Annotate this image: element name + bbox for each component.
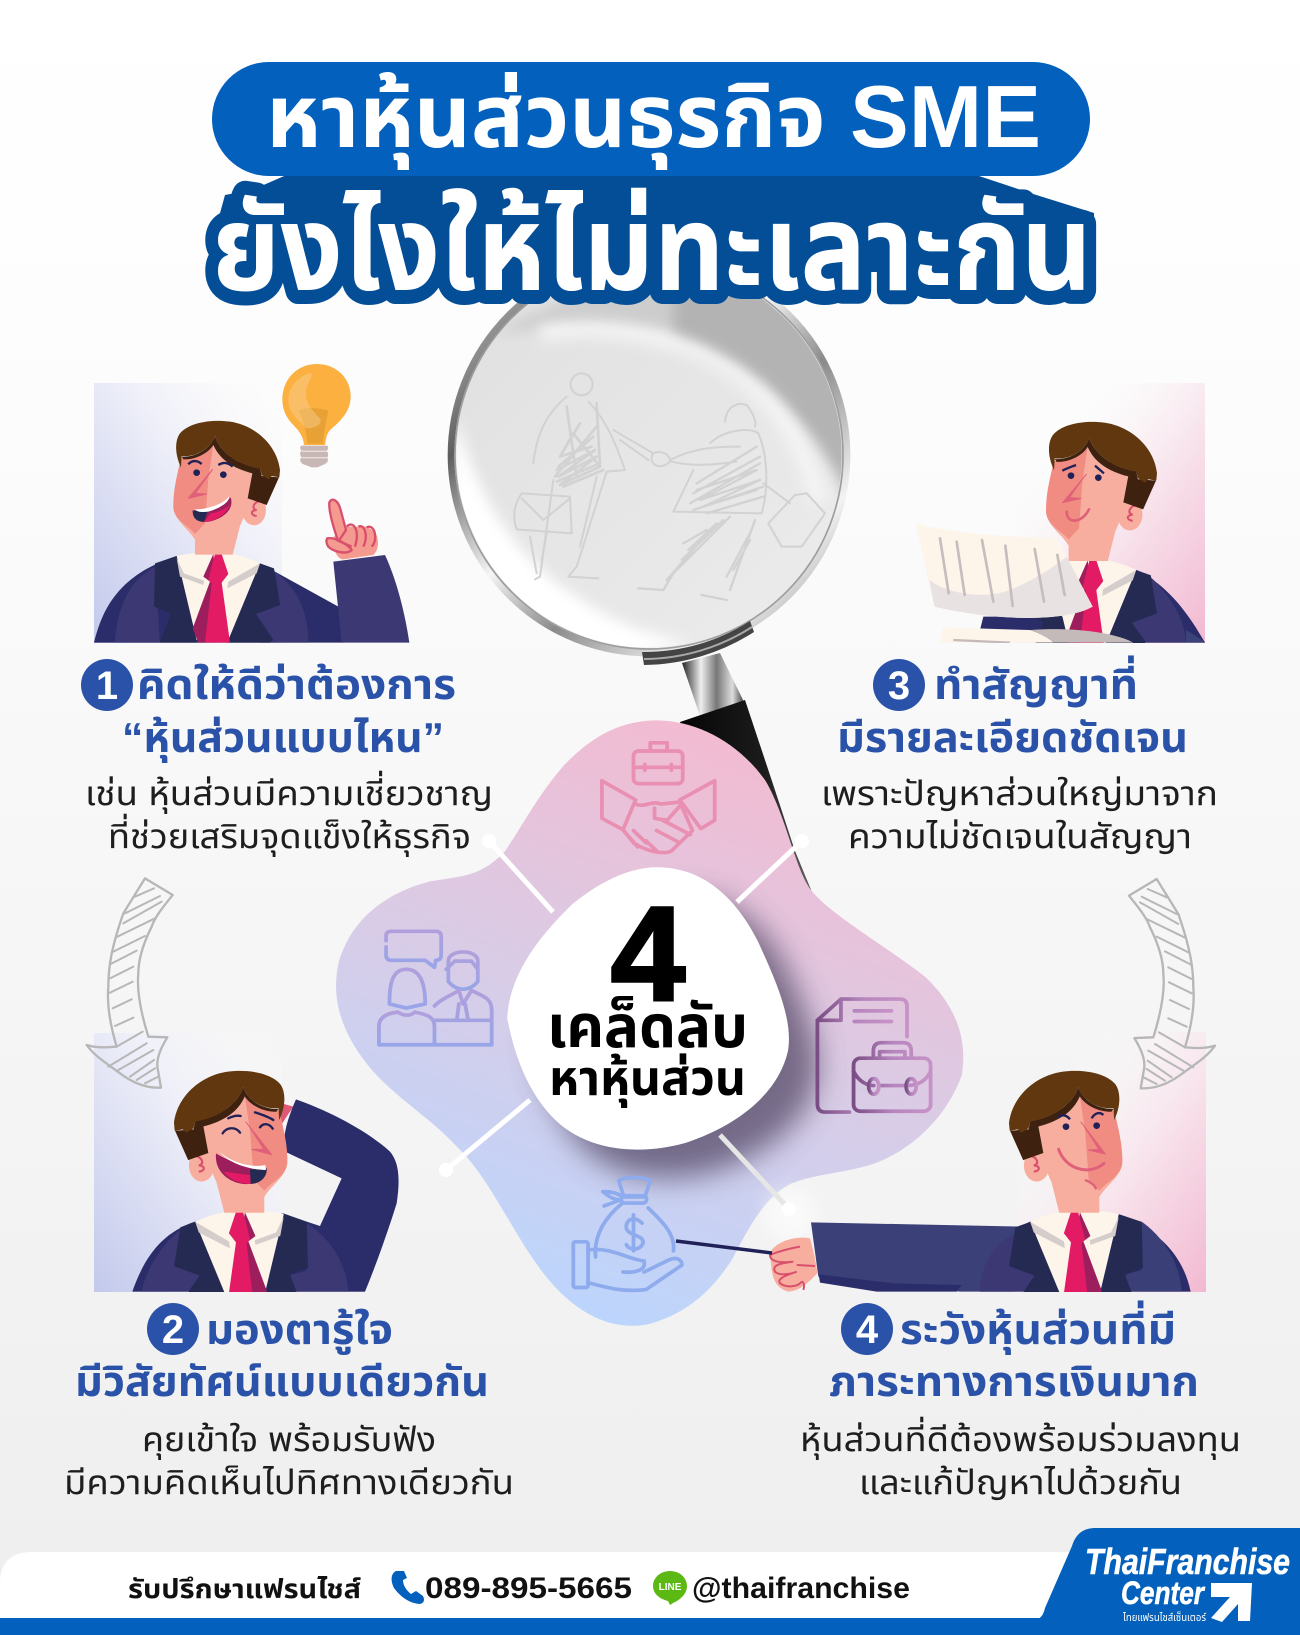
connector lines from centre to each tip bbox=[439, 834, 809, 1216]
logo: ThaiFranchise Center: Center bbox=[1121, 1575, 1205, 1611]
icon: document and briefcase bbox=[817, 999, 931, 1112]
text block 1 bbox=[81, 659, 493, 857]
text block 3 bbox=[821, 655, 1218, 856]
arrow: left sketched curved arrow bbox=[87, 878, 173, 1088]
text block 3: เพราะปัญหาส่วนใหญ่มาจาก bbox=[821, 775, 1218, 813]
text block 1: ที่ช่วยเสริมจุดแข็งให้ธุรกิจ bbox=[108, 813, 471, 857]
fist holding pointer bbox=[770, 1238, 817, 1292]
sketch: two business people shaking hands bbox=[514, 373, 825, 600]
arrow: right sketched curved arrow bbox=[1129, 879, 1215, 1088]
logo: ThaiFranchise Center bbox=[1030, 1528, 1300, 1635]
text block 2: มองตารู้ใจ bbox=[206, 1306, 393, 1355]
character 2: man scratching head bbox=[132, 1071, 399, 1306]
footer: phone number: 089-895-5665 bbox=[425, 1572, 632, 1605]
centre text: หาหุ้นส่วน: หาหุ้นส่วน bbox=[549, 1052, 746, 1108]
logo: ThaiFranchise Center: ไทยแฟรนไชส์เซ็นเตอร์ bbox=[1122, 1612, 1206, 1624]
number badge 2: 2 bbox=[162, 1308, 184, 1352]
arrow: magnifier handle bbox=[642, 621, 812, 900]
text block 4: และแก้ปัญหาไปด้วยกัน bbox=[859, 1464, 1182, 1502]
glow around connector tip bbox=[764, 1189, 816, 1241]
text block 3: ความไม่ชัดเจนในสัญญา bbox=[848, 818, 1192, 856]
number badge 2 bbox=[147, 1303, 199, 1355]
text block 2: มีความคิดเห็นไปทิศทางเดียวกัน bbox=[64, 1464, 514, 1502]
contract papers bbox=[916, 524, 1133, 643]
number badge 1 bbox=[81, 659, 133, 711]
footer bar bbox=[0, 1552, 1300, 1635]
icon: LINE: LINE bbox=[659, 1582, 682, 1593]
magnifying glass bbox=[448, 294, 850, 656]
footer: handle: @thaifranchise bbox=[692, 1572, 910, 1605]
subtitle with outlined text: ยังไงให้ไม่ทะเลาะกัน bbox=[212, 182, 1092, 316]
number badge 4 bbox=[841, 1303, 893, 1355]
icon: money bag on hand bbox=[573, 1178, 682, 1290]
text block 1: เช่น หุ้นส่วนมีความเชี่ยวชาญ bbox=[85, 770, 493, 814]
icon: handshake and briefcase bbox=[602, 743, 715, 853]
icon: logo arrow bbox=[1211, 1583, 1252, 1622]
text block 1: “หุ้นส่วนแบบไหน” bbox=[122, 714, 444, 763]
number badge 1: 1 bbox=[96, 664, 118, 708]
text block 4: ภาระทางการเงินมาก bbox=[829, 1358, 1199, 1405]
text block 4: หุ้นส่วนที่ดีต้องพร้อมร่วมลงทุน bbox=[800, 1416, 1241, 1460]
text block 2: คุยเข้าใจ พร้อมรับฟัง bbox=[142, 1421, 436, 1460]
text block 3: มีรายละเอียดชัดเจน bbox=[837, 714, 1188, 761]
character 4: man pointing stick at blob bbox=[770, 1071, 1191, 1306]
number badge 3 bbox=[873, 659, 925, 711]
footer: consult label: รับปรึกษาแฟรนไชส์ bbox=[128, 1574, 361, 1604]
icon: LINE bbox=[653, 1571, 687, 1605]
text block 2 bbox=[64, 1303, 514, 1502]
centre text: เคล็ดลับ: เคล็ดลับ bbox=[547, 993, 748, 1060]
number badge 4: 4 bbox=[856, 1308, 879, 1352]
character 3: man reading contract bbox=[916, 422, 1205, 653]
sleeve and pointing hand bbox=[326, 500, 409, 643]
pointer stick bbox=[676, 1241, 772, 1253]
panel: illustration backgrounds bbox=[94, 383, 1206, 1292]
title pill: หาหุ้นส่วนธุรกิจ SME bbox=[266, 67, 1041, 170]
icon: light bulb bbox=[282, 364, 351, 467]
text block 4 bbox=[800, 1300, 1241, 1502]
text block 4: ระวังหุ้นส่วนที่มี bbox=[900, 1300, 1176, 1355]
icon: two people talking bbox=[379, 931, 492, 1045]
character 1: man with idea bbox=[94, 364, 409, 643]
blob: pastel four-lobed background bbox=[336, 720, 963, 1326]
number badge 3: 3 bbox=[888, 664, 910, 708]
text block 3: ทำสัญญาที่ bbox=[934, 655, 1138, 708]
big number 4: 4 bbox=[611, 880, 685, 1029]
text block 2: มีวิสัยทัศน์แบบเดียวกัน bbox=[75, 1358, 489, 1405]
icon: phone bbox=[392, 1571, 424, 1604]
centre blob with heading bbox=[507, 867, 789, 1150]
text block 1: คิดให้ดีว่าต้องการ bbox=[137, 661, 456, 708]
